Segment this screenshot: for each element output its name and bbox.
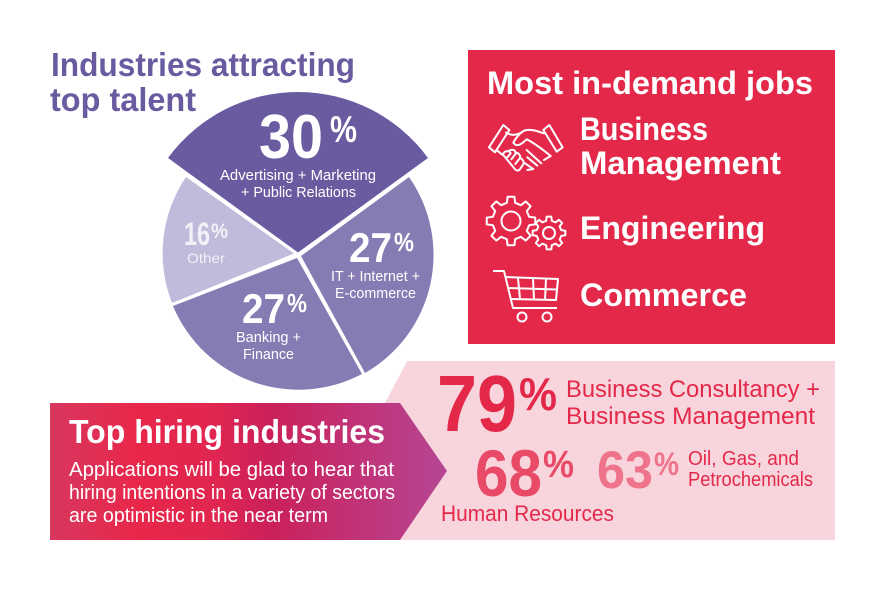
stat: 63%: % [654, 446, 679, 482]
stat: 79%: Business Management [566, 403, 815, 430]
stat: 68%: Human Resources [441, 501, 614, 526]
stat: 79%: Business Consultancy + [566, 376, 820, 403]
stat: 79% [437, 359, 820, 448]
stat: 79%: 79 [437, 359, 517, 448]
stat: 68%: % [543, 444, 574, 486]
slice: advertising, marketing and public relations 30%: % [330, 109, 357, 150]
stat: 63%: 63 [597, 441, 653, 500]
title: industries attracting top talent [50, 46, 355, 118]
panel: most in-demand jobs [468, 50, 835, 344]
arrow panel: top hiring industries [50, 403, 447, 540]
stat: 68%: 68 [475, 436, 542, 510]
slice: IT, internet and e-commerce 27%: % [394, 227, 414, 257]
stat: 63%: Petrochemicals [688, 469, 813, 491]
job labels: Commerce [580, 277, 747, 313]
slice: banking and finance 27%: 27 [242, 285, 285, 332]
title: industries attracting top talent: top talent [50, 81, 196, 118]
slice: other 16% [163, 177, 294, 303]
slice: IT, internet and e-commerce 27%: IT + Internet + [331, 269, 420, 285]
slice: banking and finance 27%: Finance [243, 347, 294, 363]
slice: banking and finance 27%: Banking + [236, 330, 301, 346]
job labels [580, 111, 781, 313]
job labels: Business [580, 111, 708, 147]
panel: hiring percentages [385, 359, 835, 540]
slice: banking and finance 27% [173, 258, 362, 390]
slice: IT, internet and e-commerce 27% [301, 177, 434, 373]
pie chart: industries [163, 92, 434, 390]
slice: advertising, marketing and public relations 30% [168, 92, 428, 253]
stat: 63%: Oil, Gas, and [688, 448, 799, 470]
icon: gears [487, 197, 565, 249]
stat: 63% [597, 441, 813, 500]
body text: are optimistic in the near term [69, 505, 328, 527]
body text: hiring intentions in a variety of sectors [69, 482, 395, 504]
stat: 68% [441, 436, 614, 526]
slice: IT, internet and e-commerce 27%: E-commerce [335, 286, 416, 302]
heading: most in-demand jobs: Most in-demand jobs [487, 65, 813, 101]
icon: shopping cart [493, 271, 558, 322]
body text [69, 459, 395, 527]
slice: other 16%: 16 [184, 216, 210, 252]
job labels: Management [580, 145, 781, 181]
slice: advertising, marketing and public relations 30%: Advertising + Marketing [220, 167, 376, 184]
job labels: Engineering [580, 210, 765, 246]
icon: handshake [489, 125, 563, 171]
slice: advertising, marketing and public relations 30%: + Public Relations [241, 184, 356, 201]
slice: other 16%: % [211, 220, 228, 243]
heading: top hiring industries: Top hiring industries [69, 413, 385, 450]
slice: IT, internet and e-commerce 27%: 27 [349, 224, 392, 271]
title: industries attracting top talent: Industries attracting [51, 46, 355, 83]
stat: 79%: % [519, 368, 557, 420]
slice: advertising, marketing and public relations 30%: 30 [259, 103, 323, 172]
body text: Applications will be glad to hear that [69, 459, 394, 481]
slice: other 16%: Other [187, 250, 225, 266]
slice: banking and finance 27%: % [287, 288, 307, 318]
